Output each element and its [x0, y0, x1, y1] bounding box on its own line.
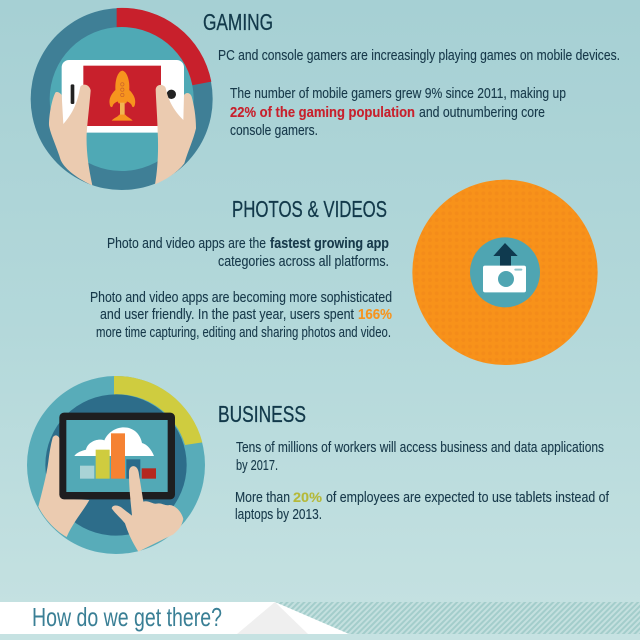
icon: cloud [74, 427, 154, 456]
heading: business: BUSINESS [218, 401, 306, 427]
panel: gaming [31, 8, 620, 190]
text block: business intro: by 2017. [236, 457, 278, 474]
text block: business statistic: laptops by 2013. [235, 506, 322, 523]
text block: gaming statistic: console gamers. [230, 122, 318, 139]
text block: photos statistic: 166% [358, 306, 392, 323]
text block: gaming statistic: The number of mobile gamers grew 9% since 2011, making up [230, 85, 566, 102]
bar chart [80, 433, 156, 479]
text block: photos intro: categories across all platforms. [218, 253, 389, 270]
icon: right hand [155, 85, 196, 184]
text block: photos statistic [90, 289, 392, 341]
heading: how do we get there: How do we get there? [32, 602, 222, 632]
text block: business statistic: 20% [293, 489, 323, 505]
text block: business statistic [235, 489, 610, 523]
text block: gaming statistic: 22% of the gaming population [230, 104, 415, 121]
text block: photos intro: fastest growing app [270, 235, 389, 252]
heading: photos and videos: PHOTOS & VIDEOS [232, 196, 387, 222]
text block: gaming statistic [230, 85, 566, 139]
banner: how do we get there [0, 602, 640, 634]
icon: camera [483, 266, 526, 292]
icon: tablet [59, 413, 175, 499]
text block: photos intro [107, 235, 389, 270]
text block: photos statistic: more time capturing, editing and sharing photos and video. [96, 324, 391, 341]
panel: photos and videos [90, 180, 598, 365]
icon: orange circle with camera upload [412, 180, 598, 365]
heading: gaming: GAMING [203, 9, 273, 35]
text block: business statistic: More than [235, 489, 290, 506]
icon: pointing hand [112, 466, 183, 552]
text block: photos intro: Photo and video apps are the [107, 235, 266, 252]
icon: left hand [38, 435, 89, 537]
icon: left hand [49, 85, 92, 185]
text block: business intro [236, 439, 604, 474]
icon: hands holding phone with rocket game [31, 8, 213, 190]
icon: rocket [109, 71, 135, 121]
icon: hands using tablet with charts [27, 376, 205, 554]
text block: photos statistic: Photo and video apps are becoming more sophisticated [90, 289, 392, 306]
panel: business [27, 376, 610, 554]
text block: photos statistic: and user friendly. In the past year, users spent [100, 306, 355, 323]
text block: gaming statistic: and outnumbering core [419, 104, 545, 121]
icon: upload arrow [493, 243, 518, 267]
